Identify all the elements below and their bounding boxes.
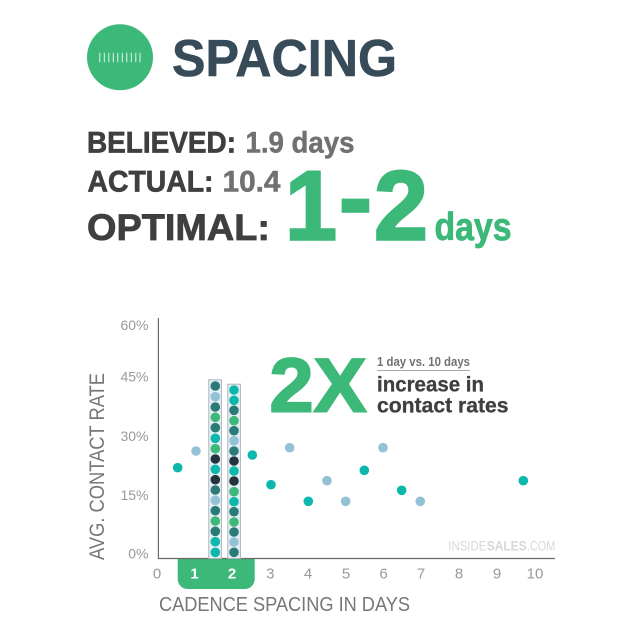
x axis tick labels: 10 <box>527 566 543 583</box>
callout: 2X increase <box>270 344 508 428</box>
callout: 2X increase: 2X <box>270 344 367 428</box>
optimal stat: OPTIMAL: <box>87 207 270 248</box>
x axis title: CADENCE SPACING IN DAYS <box>159 594 410 616</box>
x axis tick labels: 6 <box>379 566 388 583</box>
x axis tick labels: 1 <box>190 566 199 583</box>
y axis tick labels: 30% <box>120 428 148 444</box>
icon: spacing circle <box>87 24 153 90</box>
y axis tick labels: 60% <box>120 317 148 333</box>
x axis tick labels <box>153 566 543 583</box>
y axis title: AVG. CONTACT RATE <box>86 373 109 560</box>
y axis tick labels <box>120 317 148 562</box>
column: day 1 dots <box>209 380 221 558</box>
actual stat: 10.4 <box>222 166 281 199</box>
y axis tick labels: 15% <box>120 487 148 503</box>
believed stat: BELIEVED: <box>87 127 236 160</box>
y axis tick labels: 0% <box>128 546 148 562</box>
x axis tick labels: 9 <box>493 566 501 583</box>
x axis tick labels: 0 <box>153 566 161 583</box>
optimal stat: days <box>434 206 512 249</box>
title: SPACING <box>172 30 397 88</box>
optimal stat: - <box>339 142 372 252</box>
actual stat: ACTUAL: <box>88 166 214 199</box>
chart: contact rate by cadence spacing <box>86 317 555 616</box>
scatter dots <box>173 443 528 506</box>
actual stat <box>88 166 281 199</box>
watermark <box>448 539 555 554</box>
axes <box>158 318 555 558</box>
believed stat: 1.9 days <box>246 127 354 160</box>
watermark: SALES <box>487 539 527 554</box>
x axis tick labels: 8 <box>455 566 463 583</box>
callout: 2X increase: 1 day vs. 10 days <box>377 354 470 369</box>
watermark: INSIDE <box>448 539 486 554</box>
watermark: .COM <box>527 539 555 554</box>
column: day 2 dots <box>228 384 240 558</box>
callout: 2X increase: contact rates <box>377 394 508 417</box>
x axis tick labels: 2 <box>228 566 236 583</box>
x axis tick labels: 4 <box>304 566 312 583</box>
optimal stat: 1 <box>285 150 337 260</box>
x axis tick labels: 3 <box>266 566 274 583</box>
x axis tick labels: 7 <box>417 566 425 583</box>
optimal stat <box>87 142 512 260</box>
y axis tick labels: 45% <box>120 369 148 385</box>
x axis tick labels: 5 <box>342 566 350 583</box>
callout: 2X increase: increase in <box>377 374 484 397</box>
optimal stat: 2 <box>374 150 428 260</box>
believed stat <box>87 127 354 160</box>
highlight tab for days 1 and 2 <box>178 558 255 589</box>
